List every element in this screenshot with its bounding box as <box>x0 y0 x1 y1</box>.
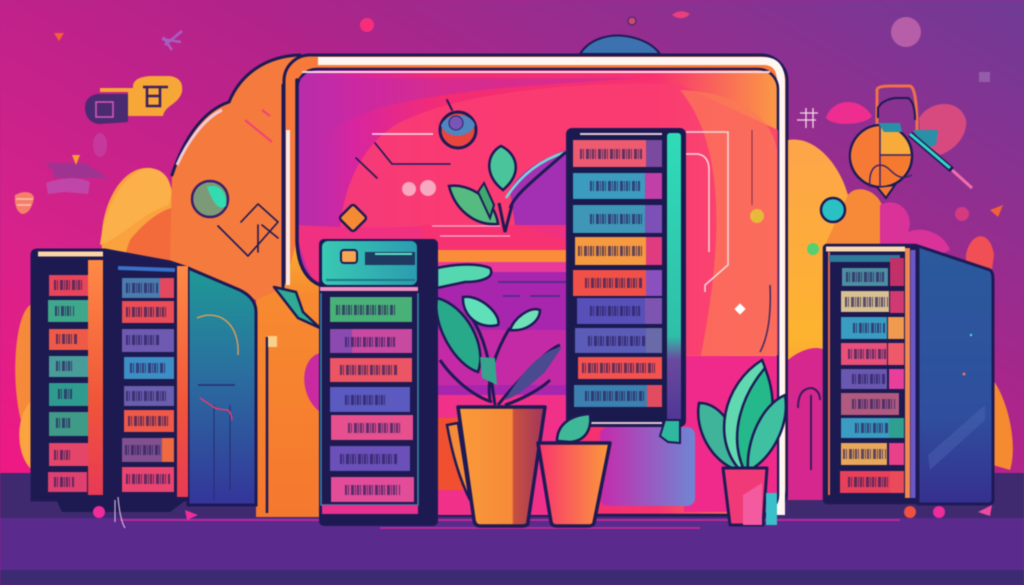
tall center server rack <box>567 129 685 426</box>
drive rows <box>330 297 412 322</box>
right server rack <box>824 245 993 518</box>
right plant pot <box>723 468 777 525</box>
screen line marks <box>356 130 770 352</box>
front frame <box>32 250 188 500</box>
right plant <box>698 360 786 470</box>
green splash <box>807 243 819 255</box>
right blobs <box>788 139 1013 500</box>
top unit <box>322 241 417 285</box>
plant: upper sprig <box>449 146 566 232</box>
right teal circle <box>821 198 845 222</box>
floor wires <box>115 497 125 528</box>
side panel <box>188 268 256 505</box>
right background stem <box>798 388 820 470</box>
cloud arrow lines <box>218 204 278 256</box>
leaf behind center rack <box>274 287 320 328</box>
orange lower-left patch <box>256 240 320 517</box>
white left strip <box>286 130 290 285</box>
left server rack <box>32 250 256 520</box>
drive rows <box>842 268 888 286</box>
plant: large potted plant <box>436 265 562 405</box>
small leaf <box>557 414 590 442</box>
screen dots <box>402 180 436 196</box>
screen round orb icon <box>440 100 476 148</box>
lower blue box <box>600 427 695 506</box>
left background blobs <box>15 168 250 470</box>
top dome <box>580 36 660 54</box>
screen diamond icon <box>339 204 367 232</box>
center-left server rack <box>320 240 437 525</box>
top white edge <box>318 61 781 515</box>
orange pot <box>458 407 545 526</box>
floor <box>0 473 1024 585</box>
drive rows <box>573 140 662 167</box>
pie chart icon cluster <box>826 86 972 198</box>
screen lower left scene <box>298 150 566 515</box>
main panel <box>284 55 787 515</box>
drive rows <box>49 275 88 296</box>
screen left curve edge <box>297 80 320 285</box>
screen yellow dot <box>750 209 764 223</box>
side panel <box>918 246 993 504</box>
cloud circle icon <box>192 181 228 217</box>
pot back shape <box>447 423 470 500</box>
screen <box>297 69 778 515</box>
rack feet <box>55 497 190 512</box>
pink-orange pot <box>538 443 610 526</box>
panel outer left edge <box>282 85 284 290</box>
teal side strip <box>667 133 681 423</box>
front frame <box>824 245 918 503</box>
rack connector <box>660 420 680 443</box>
orange cloud shape behind main panel <box>170 55 330 515</box>
chat icons <box>85 76 182 124</box>
rack feet <box>904 506 916 518</box>
top decorations <box>15 11 1003 221</box>
